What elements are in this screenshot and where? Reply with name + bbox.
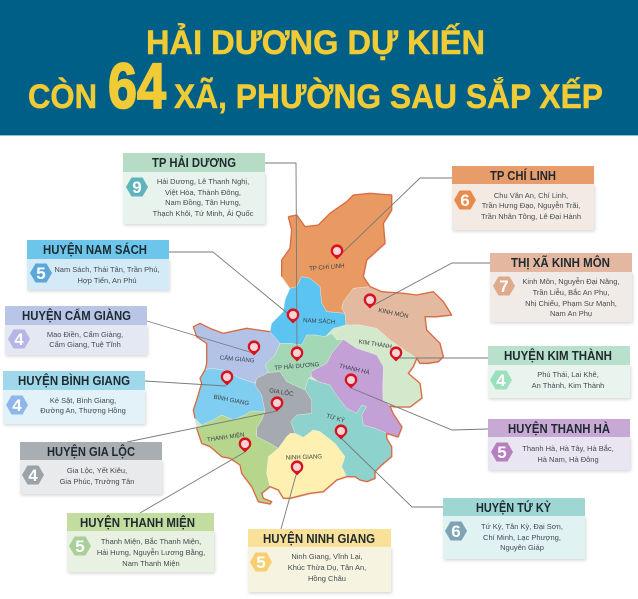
panel: Huyện Thanh Hà: 5: [497, 443, 507, 462]
panel: Huyện Kim Thành: HUYỆN KIM THÀNH: [504, 348, 612, 363]
panel: TP Chí Linh: 6: [460, 191, 470, 210]
panel: Huyện Ninh Giang: [248, 529, 391, 592]
map district labels: BÌNH GIANG: [213, 394, 250, 407]
panel: Huyện Thanh Miện: Thanh Miện, Bắc Thanh Miện,: [101, 537, 201, 546]
title line 1: HẢI DƯƠNG DỰ KIẾN: [146, 24, 485, 62]
panel: Huyện Thanh Hà: [488, 419, 630, 470]
map district labels: THANH MIỆN: [206, 430, 245, 444]
region: Huyện Thanh Miện: [197, 412, 278, 504]
panel: Thị xã Kinh Môn: 7: [499, 277, 509, 296]
panel: Huyện Gia Lộc: Gia Phúc, Trường Tân: [60, 477, 134, 486]
map district labels: KINH MÔN: [378, 307, 409, 320]
panel: Huyện Tứ Kỳ: 6: [451, 522, 461, 541]
map district labels: KIM THÀNH: [358, 338, 392, 351]
panel: TP Chí Linh: Trần Nhân Tông, Lê Đại Hành: [481, 212, 581, 221]
region: Huyện Bình Giang: [193, 368, 265, 425]
panel: Huyện Tứ Kỳ: Chí Minh, Lạc Phượng,: [483, 533, 561, 542]
region: Huyện Tứ Kỳ: [291, 378, 392, 482]
panel: Huyện Kim Thành: [488, 346, 630, 398]
region: Huyện Thanh Hà: [311, 339, 402, 437]
map district labels: THANH HÀ: [338, 363, 371, 377]
panel: TP Hải Dương: Hải Dương, Lê Thanh Nghị,: [157, 177, 249, 186]
map district labels: TP CHÍ LINH: [309, 262, 345, 273]
panel: Thị xã Kinh Môn: Kinh Môn, Nguyễn Đại Năng,: [522, 277, 620, 286]
map district labels: NINH GIANG: [286, 453, 322, 462]
panel: Huyện Ninh Giang: Ninh Giang, Vĩnh Lại,: [291, 552, 363, 561]
panel: Thị xã Kinh Môn: Nam An Phụ: [550, 309, 592, 318]
header banner: [0, 0, 638, 136]
panel: Thị xã Kinh Môn: Nhị Chiểu, Phạm Sư Mạnh,: [525, 299, 617, 308]
title line 2: XÃ, PHƯỜNG SAU SẮP XẾP: [174, 78, 603, 116]
panel: TP Hải Dương: Thạch Khôi, Tứ Minh, Ái Quốc: [153, 209, 254, 218]
panel: Huyện Thanh Miện: HUYỆN THANH MIỆN: [80, 515, 195, 530]
panel: TP Chí Linh: TP CHÍ LINH: [490, 168, 556, 183]
panel: Huyện Bình Giang: Kẻ Sặt, Bình Giang,: [50, 396, 116, 405]
leader lines: [127, 163, 490, 529]
region: Huyện Cẩm Giàng: [193, 323, 280, 383]
title line 2: [28, 50, 603, 122]
panel: Huyện Bình Giang: 4: [12, 396, 22, 415]
panel: Huyện Tứ Kỳ: HUYỆN TỨ KỲ: [476, 500, 551, 515]
region: Huyện Gia Lộc: [255, 372, 312, 448]
panel: TP Chí Linh: Trần Hưng Đạo, Nguyễn Trãi,: [482, 201, 580, 210]
panel: Huyện Nam Sách: Nam Sách, Thái Tân, Trần Phú,: [54, 265, 160, 274]
panel: TP Chí Linh: Chu Văn An, Chí Linh,: [494, 191, 568, 200]
region: TP Chí Linh: [282, 193, 392, 313]
panel: Huyện Gia Lộc: [20, 442, 162, 494]
map district labels: TỪ KỲ: [325, 413, 345, 425]
panel: Huyện Gia Lộc: 4: [28, 466, 38, 485]
panel: Huyện Gia Lộc: HUYỆN GIA LỘC: [47, 444, 136, 459]
panel: TP Hải Dương: Việt Hòa, Thành Đông,: [165, 188, 241, 197]
panel: TP Hải Dương: [123, 153, 265, 224]
panel: Huyện Nam Sách: 5: [36, 264, 46, 283]
panel: Huyện Ninh Giang: 5: [256, 553, 266, 572]
panel: Huyện Tứ Kỳ: [443, 498, 585, 559]
panel: Huyện Nam Sách: Hợp Tiến, An Phú: [77, 276, 137, 285]
map outline: [193, 193, 452, 504]
panel: Huyện Tứ Kỳ: Tứ Kỳ, Tân Kỳ, Đại Sơn,: [481, 522, 563, 531]
panel: Huyện Bình Giang: [3, 371, 145, 424]
map district labels: GIA LỘC: [269, 387, 294, 398]
panel: TP Hải Dương: TP HẢI DƯƠNG: [152, 155, 236, 170]
map base: [193, 193, 452, 504]
panel: Huyện Thanh Miện: Nam Thanh Miện: [122, 559, 180, 568]
panel: Huyện Ninh Giang: Khúc Thừa Dụ, Tân An,: [288, 563, 366, 572]
panel: Huyện Gia Lộc: Gia Lộc, Yết Kiêu,: [67, 466, 127, 475]
panel: Huyện Cẩm Giàng: Cẩm Giang, Tuệ Tĩnh: [49, 340, 121, 349]
panel: Huyện Thanh Hà: Thanh Hà, Hà Tây, Hà Bắc,: [522, 444, 614, 453]
panel: Huyện Kim Thành: 4: [496, 371, 506, 390]
panel: TP Hải Dương: 9: [132, 178, 142, 197]
region: TP Hải Dương: [265, 333, 343, 390]
panel: Huyện Thanh Miện: Hải Hưng, Nguyễn Lương Bằng,: [97, 548, 205, 557]
region: Huyện Nam Sách: [270, 277, 346, 345]
panel: Huyện Thanh Hà: Hà Nam, Hà Đông: [537, 455, 599, 464]
panel: Huyện Bình Giang: Đường An, Thượng Hồng: [40, 406, 126, 415]
panel: Huyện Ninh Giang: HUYỆN NINH GIANG: [263, 531, 375, 546]
panel: Thị xã Kinh Môn: Trần Liễu, Bắc An Phụ,: [533, 288, 609, 297]
map of Hải Dương districts: [193, 193, 452, 504]
title line 2: CÒN: [28, 78, 97, 116]
panel: Huyện Cẩm Giàng: 4: [14, 330, 24, 349]
map district labels: [206, 262, 409, 462]
panel: Huyện Thanh Miện: 5: [75, 537, 85, 556]
title line 2: 64: [108, 50, 166, 122]
panel: Huyện Bình Giang: HUYỆN BÌNH GIANG: [18, 373, 130, 388]
panel: Huyện Tứ Kỳ: Nguyên Giáp: [500, 543, 544, 552]
region: Thị xã Kinh Môn: [342, 287, 452, 363]
panel: Huyện Kim Thành: Phú Thái, Lai Khê,: [537, 370, 599, 379]
region: Huyện Ninh Giang: [267, 430, 347, 498]
panel: Huyện Cẩm Giàng: HUYỆN CẨM GIÀNG: [22, 308, 131, 323]
map district labels: NAM SÁCH: [303, 317, 335, 326]
map pins: [221, 244, 402, 476]
map district labels: CẨM GIÀNG: [219, 354, 255, 365]
panel: Huyện Nam Sách: [27, 240, 169, 290]
panel: TP Hải Dương: Nam Đồng, Tân Hưng,: [165, 198, 241, 207]
panel: Huyện Cẩm Giàng: Mao Điền, Cẩm Giàng,: [47, 330, 123, 339]
panel: Thị xã Kinh Môn: [490, 253, 632, 322]
panel: Huyện Thanh Hà: HUYỆN THANH HÀ: [508, 421, 611, 436]
region: Huyện Kim Thành: [332, 325, 422, 407]
panel: Huyện Cẩm Giàng: [5, 306, 147, 355]
panel: Huyện Nam Sách: HUYỆN NAM SÁCH: [43, 242, 147, 257]
panel: Huyện Ninh Giang: Hồng Châu: [308, 574, 346, 583]
panel: Huyện Thanh Miện: [67, 513, 214, 572]
panel: TP Chí Linh: [452, 166, 594, 230]
panel: Huyện Kim Thành: An Thành, Kim Thành: [532, 381, 604, 390]
map district labels: TP HẢI DƯƠNG: [274, 361, 320, 372]
panel: Thị xã Kinh Môn: THỊ XÃ KINH MÔN: [511, 255, 610, 270]
